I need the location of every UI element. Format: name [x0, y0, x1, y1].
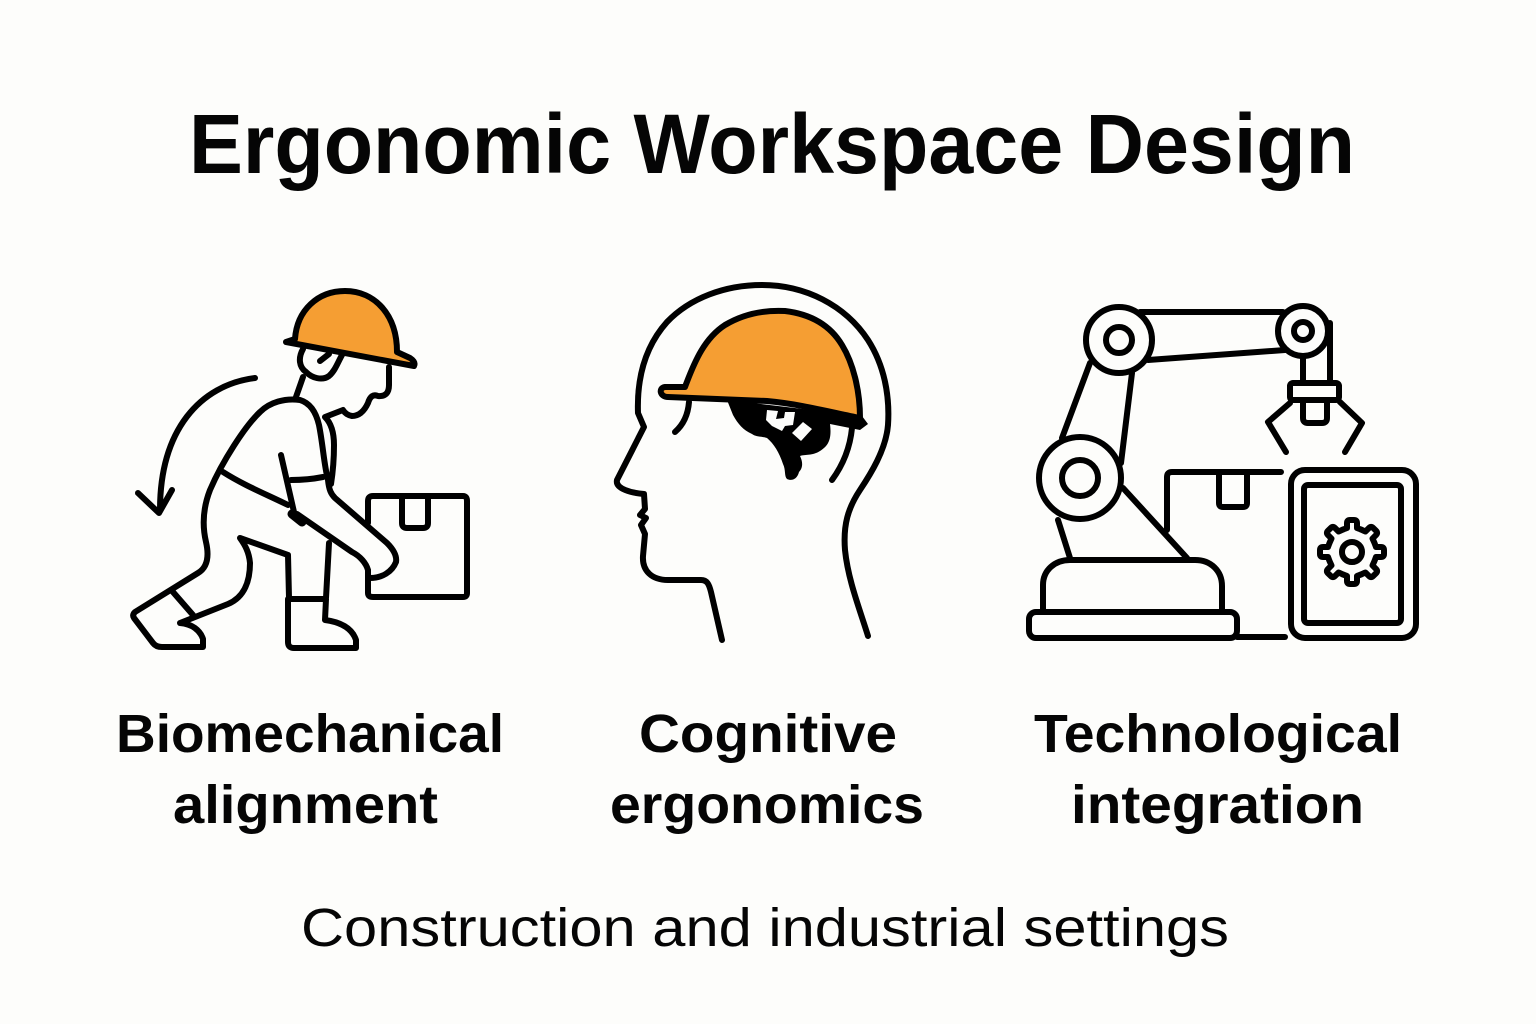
label: cognitive ergonomics — [610, 704, 924, 835]
brain silhouette — [727, 400, 868, 480]
worker boot — [288, 543, 356, 648]
title: Ergonomic Workspace Design — [189, 97, 1355, 191]
tablet outer — [1291, 470, 1416, 638]
brain highlights — [766, 410, 812, 441]
gripper clamp — [1290, 383, 1339, 400]
label: biomechanical alignment: Biomechanical — [116, 704, 504, 764]
label: technological integration: Technological — [1034, 704, 1402, 764]
floor line — [1237, 634, 1285, 640]
base plate — [1029, 612, 1237, 638]
icon: robot arm with tablet — [1029, 306, 1416, 638]
gear icon — [1320, 520, 1384, 584]
robot gripper — [1268, 323, 1362, 452]
label: technological integration: integration — [1071, 775, 1364, 835]
robot upper arm — [1058, 312, 1285, 558]
panel: biomechanical alignment — [116, 291, 504, 835]
robot base — [1043, 560, 1222, 610]
subtitle: Construction and industrial settings — [301, 898, 1229, 958]
worker clothing seams — [173, 455, 323, 615]
head outline — [617, 285, 888, 640]
box — [1167, 472, 1281, 530]
robot wrist joint — [1278, 306, 1328, 356]
downward motion arrow — [138, 378, 255, 513]
worker ear — [300, 349, 342, 379]
robot base joint — [1039, 437, 1121, 519]
box — [368, 496, 467, 597]
label: cognitive ergonomics: ergonomics — [610, 775, 924, 835]
worker glove cuff — [292, 514, 302, 522]
panel: cognitive ergonomics — [610, 285, 924, 835]
label: biomechanical alignment — [116, 704, 504, 835]
icon: head with hard hat — [617, 285, 888, 640]
inner head contours — [675, 402, 852, 480]
tablet screen — [1304, 485, 1401, 623]
label: technological integration — [1034, 704, 1402, 835]
label: cognitive ergonomics: Cognitive — [639, 704, 897, 764]
hard hat — [661, 311, 860, 418]
hard hat — [286, 291, 414, 366]
icon: worker lifting a box — [133, 291, 467, 648]
worker body — [133, 367, 396, 647]
label: biomechanical alignment: alignment — [173, 775, 438, 835]
panel: technological integration — [1029, 306, 1416, 835]
robot shoulder joint — [1086, 307, 1152, 373]
